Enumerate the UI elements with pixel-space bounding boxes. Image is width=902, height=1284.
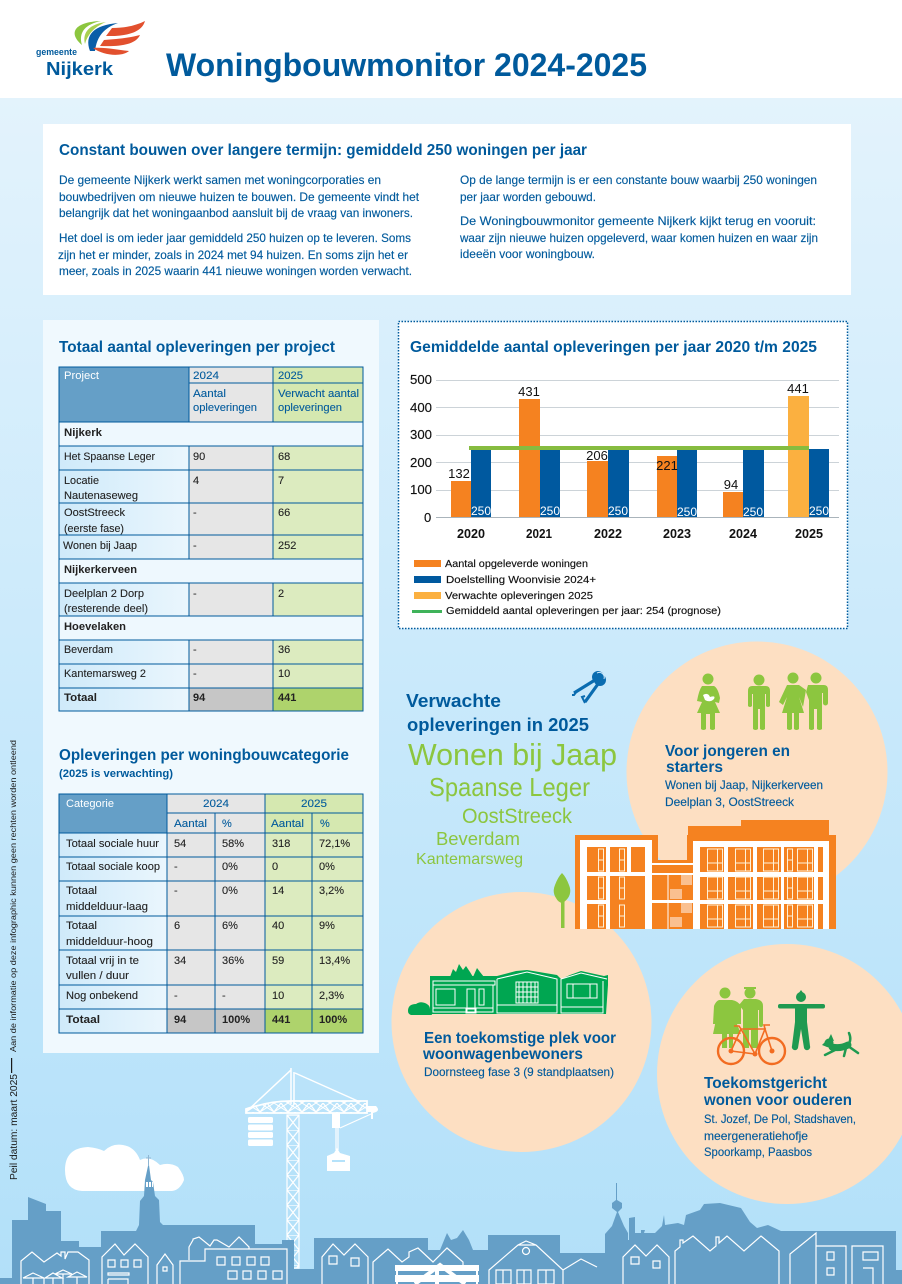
icon: elderly couple with bike (713, 987, 785, 1064)
table: categories: Totaal sociale koop (66, 861, 160, 873)
y axis and grid: 0 (424, 510, 431, 525)
table: projects (59, 367, 363, 711)
side note: date and disclaimer (8, 740, 20, 1180)
bar values: 250 (743, 505, 763, 519)
bar values: 441 (787, 381, 809, 396)
icon: person exercising (778, 990, 825, 1050)
table: projects: Wonen bij Jaap (63, 540, 137, 552)
table: categories: 0% (222, 885, 238, 897)
circle heading: wonen voor ouderen (703, 1092, 852, 1109)
table: projects: - (193, 644, 197, 656)
intro heading: Constant bouwen over langere termijn: gemiddeld 250 woningen per jaar (59, 142, 587, 159)
table: projects: 4 (193, 475, 199, 487)
bar values: 250 (608, 504, 628, 518)
table: projects: 66 (278, 507, 290, 519)
table: categories: 0 (272, 861, 278, 873)
table: projects: 10 (278, 668, 290, 680)
table: categories: Aantal (174, 818, 207, 830)
intro text right (459, 173, 818, 261)
table: projects: Kantemarsweg 2 (64, 668, 146, 680)
circle projects: Doornsteeg fase 3 (9 standplaatsen) (424, 1065, 614, 1079)
crane counterweight (248, 1117, 273, 1146)
table: projects: 252 (278, 540, 296, 552)
word cloud heading: opleveringen in 2025 (407, 715, 589, 735)
circle heading (703, 1075, 852, 1109)
table: categories: 34 (174, 955, 186, 967)
table: projects: 94 (193, 692, 206, 704)
average line (469, 446, 809, 450)
table: categories: 59 (272, 955, 284, 967)
intro text left: belangrijk dat het woningaanbod aansluit bij de vraag van inwoners. (59, 206, 413, 220)
table: categories: Totaal (66, 1014, 100, 1026)
table: projects: Nijkerkerveen (64, 564, 137, 576)
circle heading (665, 743, 790, 776)
x axis labels: 2024 (729, 527, 757, 541)
word cloud words: OostStreeck (462, 805, 572, 828)
table: projects: 441 (278, 692, 296, 704)
table: categories: 58% (222, 838, 244, 850)
table: categories: Totaal (66, 885, 97, 897)
table: projects: Verwacht aantal (278, 388, 359, 400)
table: projects: opleveringen (193, 402, 257, 414)
table: categories: 14 (272, 885, 284, 897)
crane load (327, 1113, 350, 1171)
icon: keys (572, 671, 606, 703)
table: categories: 10 (272, 990, 284, 1002)
intro text left (58, 173, 420, 278)
white gate (395, 1265, 479, 1284)
legend: Gemiddeld aantal opleveringen per jaar: 254 (prognose) (446, 605, 721, 617)
bar values: 221 (656, 458, 678, 473)
bar values: 250 (809, 504, 829, 518)
table: categories: Totaal vrij in te (66, 955, 139, 967)
table: projects: - (193, 507, 197, 519)
icon: man (748, 674, 770, 730)
word cloud heading: Verwachte (406, 691, 501, 711)
intro text left: meer, zoals in 2025 waarin 441 nieuwe woningen worden verwacht. (59, 264, 412, 278)
table: categories: middelduur-hoog (66, 936, 153, 948)
bar values: 431 (518, 384, 540, 399)
table: categories: 2025 (301, 798, 327, 810)
table: projects: Beverdam (64, 644, 113, 656)
table: categories: 72,1% (319, 838, 350, 850)
y axis and grid (410, 372, 839, 525)
table: projects: - (193, 668, 197, 680)
icon: couple (779, 672, 828, 730)
word cloud words: Spaanse Leger (429, 772, 590, 802)
table: projects: Project (64, 370, 99, 382)
table: projects: 36 (278, 644, 290, 656)
table: categories: 13,4% (319, 955, 350, 967)
intro text left: bouwbedrijven om nieuwe huizen te bouwen. De gemeente vindt het (59, 190, 420, 204)
icon: woman with baby (697, 674, 720, 730)
table: projects: - (193, 540, 197, 552)
intro text right: ideeën voor woningbouw. (460, 247, 595, 261)
table: categories: 40 (272, 920, 284, 932)
circle: woonwagenbewoners (392, 892, 652, 1152)
word cloud words (408, 737, 617, 868)
table: projects: OostStreeck (64, 507, 125, 519)
x axis labels: 2021 (526, 527, 552, 541)
panel: bar chart (398, 322, 848, 628)
heading table categories: Opleveringen per woningbouwcategorie (59, 747, 349, 764)
side note: date and disclaimer: Aan de informatie op deze infographic kunnen geen rechten worden ontleend (9, 740, 18, 1052)
table: projects: opleveringen (278, 402, 342, 414)
church tower (146, 1155, 153, 1187)
y axis and grid: 500 (410, 372, 432, 387)
table: categories: 441 (272, 1014, 290, 1026)
table: categories: 100% (222, 1014, 250, 1026)
skyline (0, 1155, 902, 1284)
table: categories: 9% (319, 920, 335, 932)
icon: young people (697, 672, 828, 730)
y axis and grid: 400 (410, 400, 432, 415)
circle heading: Een toekomstige plek voor (424, 1030, 616, 1047)
panel: tables (43, 320, 379, 1053)
word cloud words: Wonen bij Jaap (408, 737, 617, 772)
table: projects: - (193, 588, 197, 600)
table: projects: (resterende deel) (64, 603, 148, 615)
logo gemeente Nijkerk: gemeente (36, 47, 77, 58)
table: categories: 36% (222, 955, 244, 967)
table: categories (59, 794, 363, 1033)
table: projects: 90 (193, 451, 205, 463)
legend: Doelstelling Woonvisie 2024+ (446, 574, 596, 586)
circle projects (665, 778, 823, 809)
table: projects: Het Spaanse Leger (64, 451, 155, 463)
legend (412, 558, 721, 617)
x axis labels: 2023 (663, 527, 691, 541)
y axis and grid: 200 (410, 455, 432, 470)
circle: jongeren en starters (626, 642, 888, 902)
table: projects: Nautenaseweg (64, 490, 138, 502)
table: categories: - (174, 990, 178, 1002)
circle projects: meergeneratiehofje (704, 1129, 808, 1143)
house outlines (21, 1233, 883, 1284)
table: projects: Totaal (64, 692, 97, 704)
icon: mobile homes (408, 964, 608, 1015)
table: categories: Categorie (66, 798, 114, 810)
table: categories: 2024 (203, 798, 229, 810)
table: projects: 68 (278, 451, 290, 463)
circle heading: Toekomstgericht (704, 1075, 828, 1092)
table: categories: 100% (319, 1014, 347, 1026)
circle projects: Spoorkamp, Paasbos (704, 1145, 812, 1159)
table: categories: 0% (319, 861, 335, 873)
table: projects: 2024 (193, 370, 219, 382)
circle heading: starters (666, 759, 723, 776)
logo gemeente Nijkerk: Nijkerk (46, 59, 114, 79)
table: categories: Nog onbekend (66, 990, 138, 1002)
table: categories: Aantal (271, 818, 304, 830)
table: projects: Locatie (64, 475, 99, 487)
table: categories: - (222, 990, 226, 1002)
intro text left: De gemeente Nijkerk werkt samen met woningcorporaties en (59, 173, 381, 187)
circle projects (704, 1112, 856, 1159)
heading table projects: Totaal aantal opleveringen per project (59, 339, 336, 356)
icon: apartment building (575, 820, 836, 929)
table: categories: Totaal (66, 920, 97, 932)
circle projects: Deelplan 3, OostStreeck (665, 795, 795, 809)
table: categories: 3,2% (319, 885, 344, 897)
circle projects: Wonen bij Jaap, Nijkerkerveen (665, 778, 823, 792)
bar values (448, 381, 829, 519)
word cloud words: Kantemarsweg (416, 851, 523, 868)
table: categories: 318 (272, 838, 290, 850)
circle projects: St. Jozef, De Pol, Stadshaven, (704, 1112, 856, 1126)
x axis labels: 2022 (594, 527, 622, 541)
intro text right: waar zijn nieuwe huizen opgeleverd, waar komen huizen en waar zijn (459, 231, 818, 245)
table: categories: 6 (174, 920, 180, 932)
table: categories: - (174, 885, 178, 897)
bar values: 132 (448, 466, 470, 481)
cloud (65, 1145, 184, 1191)
side note: date and disclaimer: Peil datum: maart 2025 (8, 1074, 20, 1180)
intro text right: De Woningbouwmonitor gemeente Nijkerk kijkt terug en vooruit: (460, 214, 816, 228)
bar values: 250 (471, 504, 491, 518)
table: categories: % (320, 818, 330, 830)
y axis and grid: 100 (410, 482, 432, 497)
table: projects: Deelplan 2 Dorp (64, 588, 144, 600)
word cloud words: Beverdam (436, 829, 520, 849)
x axis labels: 2020 (457, 527, 485, 541)
table: categories: 94 (174, 1014, 187, 1026)
heading table categories: (2025 is verwachting) (59, 768, 173, 780)
table: categories: 6% (222, 920, 238, 932)
table: categories: 54 (174, 838, 186, 850)
x axis labels (457, 527, 823, 541)
intro text right: per jaar worden gebouwd. (460, 190, 596, 204)
title: Woningbouwmonitor 2024-2025 (166, 47, 647, 83)
table: projects: Aantal (193, 388, 226, 400)
legend: Verwachte opleveringen 2025 (445, 590, 593, 602)
word cloud heading (406, 691, 589, 735)
table: projects: Nijkerk (64, 427, 103, 439)
word cloud: expected deliveries 2025 (406, 691, 617, 868)
icon: tree (554, 873, 570, 928)
bars (451, 396, 829, 517)
circle: ouderen (657, 944, 902, 1204)
header (0, 0, 902, 98)
intro text right: Op de lange termijn is er een constante bouw waarbij 250 woningen (460, 173, 817, 187)
circle heading (422, 1030, 616, 1063)
table: categories: 2,3% (319, 990, 344, 1002)
y axis and grid: 300 (410, 427, 432, 442)
table: categories: middelduur-laag (66, 901, 148, 913)
table: categories: 0% (222, 861, 238, 873)
bar values: 250 (677, 505, 697, 519)
table: projects: 2025 (278, 370, 303, 382)
circle heading: woonwagenbewoners (422, 1046, 583, 1063)
panel: introduction (43, 124, 851, 295)
bar values: 94 (724, 477, 738, 492)
table: projects: Hoevelaken (64, 621, 126, 633)
x axis labels: 2025 (795, 527, 823, 541)
intro text left: zijn het er minder, zoals in 2024 met 94 huizen. En soms zijn het er (58, 248, 408, 262)
table: projects: (eerste fase) (64, 523, 124, 535)
table: categories: % (222, 818, 232, 830)
bar values: 206 (586, 448, 608, 463)
legend: Aantal opgeleverde woningen (445, 558, 588, 570)
bar values: 250 (540, 504, 560, 518)
table: projects: 2 (278, 588, 284, 600)
chart heading: Gemiddelde aantal opleveringen per jaar 2020 t/m 2025 (410, 339, 817, 356)
table: categories: vullen / duur (66, 970, 129, 982)
intro text left: Het doel is om ieder jaar gemiddeld 250 huizen op te leveren. Soms (59, 231, 411, 245)
table: categories: Totaal sociale huur (66, 838, 159, 850)
heading table categories (59, 747, 349, 780)
logo gemeente Nijkerk (36, 21, 145, 79)
crane (246, 1068, 378, 1268)
circle heading: Voor jongeren en (665, 743, 790, 760)
table: projects: 7 (278, 475, 284, 487)
table: categories: - (174, 861, 178, 873)
icon: dog (822, 1033, 858, 1056)
